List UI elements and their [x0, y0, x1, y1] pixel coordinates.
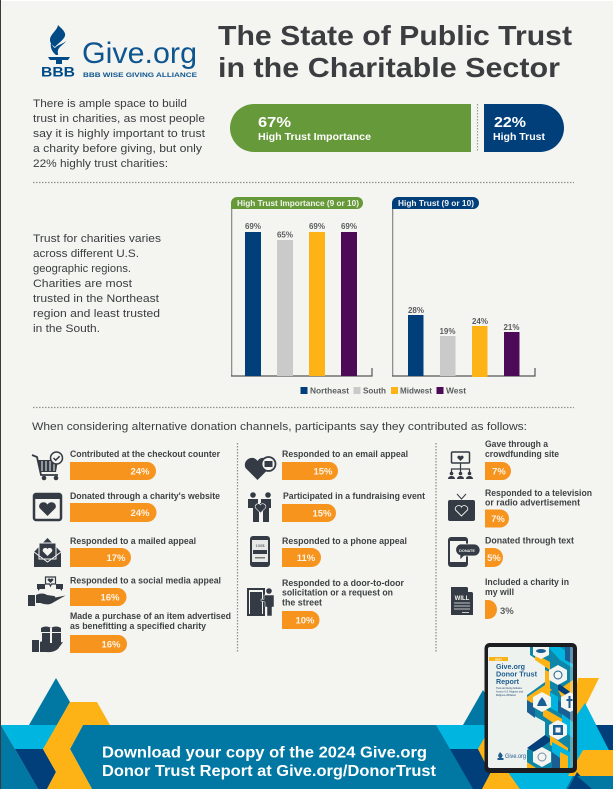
channel: phone appeal: 11% — [297, 553, 316, 564]
footer call to action: Download your copy of the 2024 Give.org — [102, 744, 427, 762]
footer banner — [70, 725, 613, 789]
bar chart: high trust importance: 69% — [245, 222, 261, 231]
tablet with report cover: Across U.S. Regions and — [496, 690, 523, 694]
bar chart: high trust importance: High Trust Importance (9 or 10) — [237, 199, 359, 208]
channel: social media appeal: Responded to a social media appeal — [70, 576, 221, 586]
tablet with report cover: Give.org — [505, 753, 526, 760]
intro text: say it is highly important to trust — [33, 128, 205, 140]
icon: smartphone donate — [250, 536, 270, 567]
channel: email appeal — [282, 449, 408, 480]
channel: mailed appeal: Responded to a mailed appeal — [70, 536, 196, 546]
channel: television or radio: Responded to a television — [485, 488, 592, 498]
channel: charity in will: Included a charity in — [485, 577, 569, 587]
channel: purchase of an item: as benefitting a specified charity — [70, 621, 206, 631]
regions text: trusted in the Northeast — [33, 293, 159, 305]
channel: phone appeal: Responded to a phone appeal — [282, 536, 407, 546]
channel: fundraising event — [282, 491, 425, 522]
channel: television or radio: or radio advertisement — [485, 498, 580, 508]
chart legend: South — [363, 386, 386, 396]
channel: fundraising event: Participated in a fundraising event — [283, 491, 425, 501]
channel: door to door: solicitation or a request on — [282, 588, 393, 598]
logo: BBB Give.org: Give.org — [82, 37, 197, 70]
bar chart: high trust importance: 69% — [341, 222, 357, 231]
icon: crowdfunding network — [448, 452, 473, 479]
channel: charity in will: my will — [485, 587, 514, 597]
comparison bar: high trust importance: High Trust Importance — [258, 132, 371, 143]
icon: phone with donate bubble — [448, 537, 480, 567]
footer call to action — [102, 744, 437, 780]
regions text: in the South. — [33, 323, 100, 335]
tablet with report cover: 2024 — [495, 657, 502, 661]
channel: crowdfunding: 7% — [492, 466, 506, 478]
bar chart: high trust: 21% — [503, 323, 520, 332]
bar chart: high trust importance — [231, 197, 372, 376]
regions text: region and least trusted — [33, 308, 160, 320]
logo: BBB Give.org — [41, 25, 198, 80]
icon: phone with donate bubble: DONATE — [459, 549, 475, 553]
channel: door to door — [282, 578, 405, 629]
channel: mailed appeal: 17% — [106, 553, 126, 564]
channel: website — [70, 491, 220, 522]
channel: door to door: 10% — [295, 616, 315, 626]
footer graphic: right shapes — [436, 678, 613, 789]
channel: checkout counter: 24% — [130, 466, 150, 478]
comparison bar: high trust: 22% — [494, 114, 526, 131]
channel: crowdfunding — [485, 439, 559, 480]
comparison bar: high trust — [484, 104, 564, 152]
intro text: a charity before giving, but only — [33, 143, 203, 155]
icon: gift in hand — [32, 626, 63, 652]
icon: television with heart — [448, 494, 475, 521]
footer call to action: Donor Trust Report at Give.org/DonorTrust — [102, 763, 437, 780]
channel: website: 24% — [130, 508, 150, 519]
tablet with report cover: Religious Affiliation — [496, 693, 516, 697]
icon: will document — [451, 587, 473, 615]
channel: checkout counter: Contributed at the checkout counter — [70, 449, 221, 459]
bar chart: high trust — [392, 197, 535, 377]
channel: phone appeal — [282, 536, 407, 567]
channel: social media appeal — [70, 576, 221, 606]
intro text: trust in charities, as most people — [33, 113, 205, 125]
comparison bar: high trust: High Trust — [493, 132, 546, 143]
logo: BBB Give.org: BBB WISE GIVING ALLIANCE — [83, 72, 198, 79]
bar chart: high trust importance: 69% — [309, 222, 325, 231]
icon: heart and envelope — [245, 457, 276, 480]
icon: envelope heart — [34, 538, 61, 567]
channel: purchase of an item — [70, 611, 231, 653]
tablet with report cover: Trust and Giving Attitudes — [496, 686, 522, 690]
tablet with report cover — [484, 642, 579, 773]
comparison bar: high trust importance — [230, 104, 471, 152]
bar chart: high trust: 19% — [439, 327, 456, 336]
channel: purchase of an item: Made a purchase of an item advertised — [70, 611, 231, 621]
channel: crowdfunding: crowdfunding site — [485, 449, 559, 459]
channel: fundraising event: 15% — [312, 508, 332, 520]
comparison bar: high trust importance: 67% — [258, 114, 291, 131]
regions text: Trust for charities varies — [33, 233, 162, 245]
bar chart: high trust: 28% — [408, 306, 424, 315]
channel: door to door: Responded to a door-to-door — [282, 578, 405, 588]
icon: door and person — [248, 588, 274, 616]
chart legend: Northeast — [310, 386, 349, 396]
channel: door to door: the street — [282, 598, 322, 608]
title: The State of Public Trust — [218, 20, 572, 51]
footer graphic: left yellow ribbon — [43, 702, 110, 789]
intro text: 22% highly trust charities: — [33, 158, 168, 170]
channel: social media appeal: 16% — [100, 592, 120, 604]
chart legend: West — [446, 386, 466, 396]
tablet with report cover: Report — [496, 679, 520, 686]
channel: charity in will — [485, 577, 569, 619]
regions text: geographic regions. — [33, 263, 131, 275]
channel: email appeal: 15% — [313, 466, 333, 478]
icon: shopping cart — [32, 452, 62, 480]
regions text: across different U.S. — [33, 248, 139, 260]
title: in the Charitable Sector — [218, 52, 560, 83]
intro text — [33, 98, 205, 170]
bar chart: high trust: High Trust (9 or 10) — [398, 199, 474, 208]
channel: television or radio: 7% — [491, 514, 505, 525]
title — [218, 20, 572, 83]
channel: mailed appeal — [70, 536, 196, 567]
channel: crowdfunding: Gave through a — [485, 439, 548, 449]
channel: donated through text: Donated through text — [485, 536, 574, 546]
tablet with report cover: Donor Trust — [496, 672, 538, 678]
icon: smartphone donate: 100$ — [256, 543, 265, 548]
intro text: There is ample space to build — [33, 98, 187, 110]
bar chart: high trust: 24% — [472, 317, 488, 326]
chart legend: Midwest — [400, 386, 432, 396]
logo: BBB Give.org: BBB — [41, 64, 75, 80]
channel: website: Donated through a charity's website — [70, 491, 220, 501]
footer graphic: left shapes — [1, 678, 70, 789]
icon: hand and chat bubbles — [28, 577, 66, 606]
channel: charity in will: 3% — [500, 606, 514, 617]
channel: television or radio — [485, 488, 592, 528]
channel: checkout counter — [70, 449, 221, 480]
icon: browser heart — [34, 494, 61, 520]
regions text: Charities are most — [33, 278, 132, 290]
channel: email appeal: Responded to an email appeal — [282, 449, 408, 459]
channel: donated through text: 5% — [487, 553, 501, 564]
tablet with report cover: Give.org — [496, 664, 525, 671]
regions text — [33, 233, 162, 335]
channel: donated through text — [485, 536, 574, 567]
bar chart: high trust importance: 65% — [277, 230, 293, 240]
donation channels heading: When considering alternative donation channels, participants say they contributed as follows: — [32, 421, 527, 433]
icon: two people with heart — [248, 492, 271, 522]
channel: purchase of an item: 16% — [101, 640, 121, 650]
chart legend — [300, 386, 466, 396]
icon: will document: WILL — [455, 596, 470, 602]
